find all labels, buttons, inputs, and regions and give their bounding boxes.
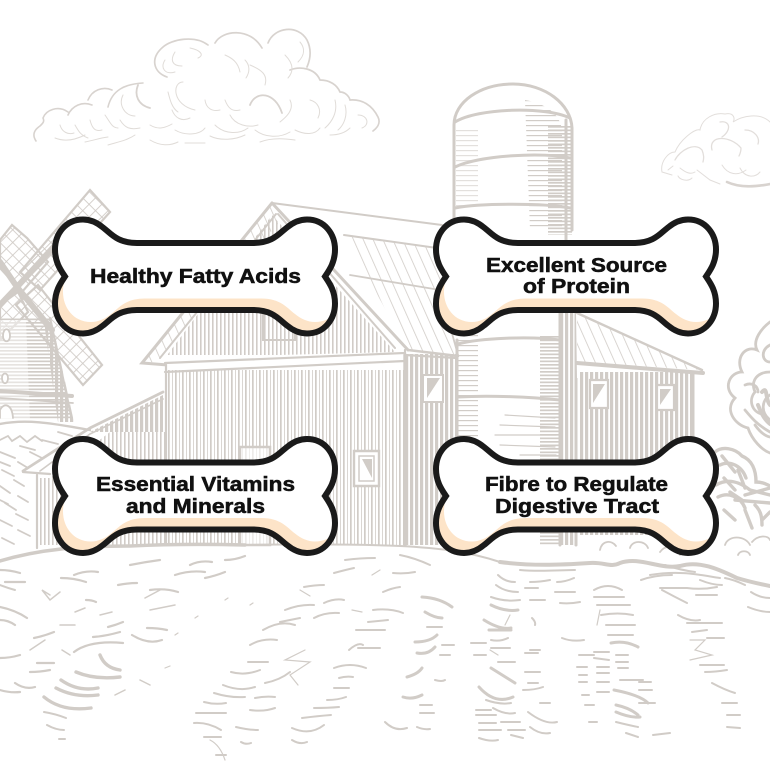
shed [23, 392, 165, 548]
hill under windmill [0, 422, 90, 544]
field furrows [0, 555, 770, 760]
tree on right [728, 322, 770, 453]
bone: Healthy Fatty Acids [50, 208, 343, 336]
windmill tower [0, 318, 72, 420]
label: Fibre to Regulate Digestive Tract: Digestive Tract [495, 495, 659, 518]
label: Excellent Source of Protein: Excellent Source [486, 254, 667, 277]
cloud left [34, 29, 379, 145]
barn gable [142, 203, 408, 365]
barn side wall [406, 354, 457, 545]
windmill [0, 190, 110, 422]
label: Essential Vitamins and Minerals [96, 473, 295, 518]
bone: Excellent Source of Protein [431, 208, 724, 336]
barn front wall [165, 350, 457, 545]
label: Essential Vitamins and Minerals: Essential Vitamins [96, 473, 295, 496]
label: Essential Vitamins and Minerals: and Minerals [126, 495, 265, 518]
windmill sails [20, 190, 110, 290]
barn right wing [576, 313, 703, 535]
bushes on right [500, 449, 770, 586]
barn roof [272, 203, 458, 356]
silo [454, 84, 577, 545]
bone: Essential Vitamins and Minerals [50, 428, 343, 556]
label: Fibre to Regulate Digestive Tract [485, 473, 668, 518]
label: Excellent Source of Protein: of Protein [523, 275, 630, 298]
cloud right [662, 114, 770, 186]
label: Healthy Fatty Acids: Healthy Fatty Acids [90, 265, 301, 288]
barn windows [423, 375, 443, 402]
bone: Fibre to Regulate Digestive Tract [431, 428, 724, 556]
ground line [0, 544, 245, 561]
label: Excellent Source of Protein [486, 254, 667, 298]
label: Fibre to Regulate Digestive Tract: Fibre to Regulate [485, 473, 668, 496]
